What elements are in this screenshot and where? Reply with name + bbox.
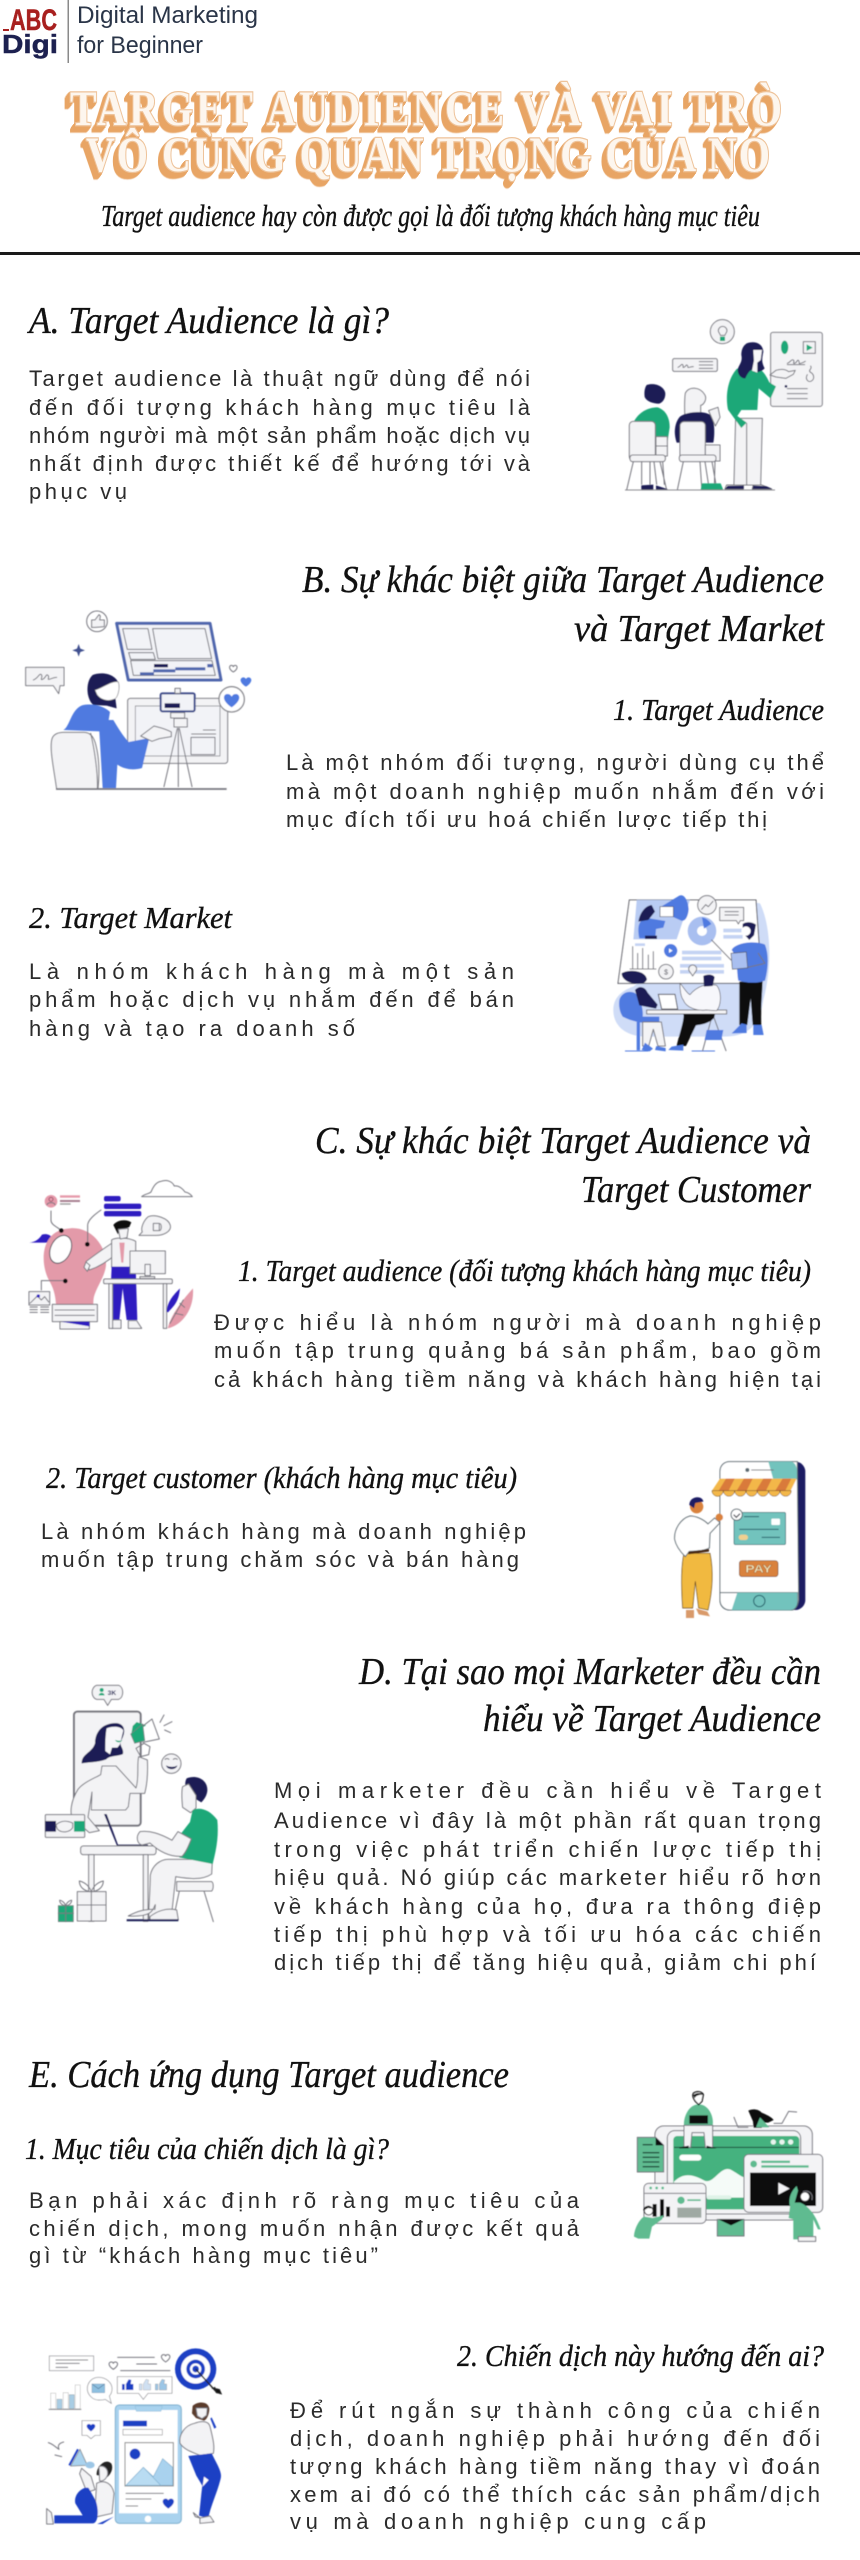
text block: A: Target audience là thuật ngữ dùng để nói	[29, 366, 530, 391]
text block: D	[274, 1778, 821, 1975]
text block: E2: Để rút ngắn sự thành công của chiến	[290, 2398, 820, 2423]
text block: D: hiệu quả. Nó giúp các marketer hiểu rõ hơn	[274, 1865, 821, 1890]
text block: C2	[41, 1519, 526, 1572]
title	[70, 81, 782, 182]
text block: D: về khách hàng của họ, đưa ra thông điệp	[274, 1894, 821, 1919]
header divider	[0, 252, 860, 255]
icon: influencer and viewer	[45, 1685, 218, 1922]
logo: for Beginner	[77, 32, 203, 59]
text block: D: Audience vì đây là một phần rất quan trọng	[274, 1808, 821, 1833]
text block: B1: mà một doanh nghiệp muốn nhắm đến với	[286, 779, 824, 804]
panel: section D	[45, 1651, 821, 1975]
heading: A: A. Target Audience là gì?	[26, 300, 389, 342]
heading: D	[358, 1651, 821, 1740]
text block: A: đến đối tượng khách hàng mục tiêu là	[29, 395, 531, 420]
logo: Digi	[2, 29, 58, 59]
logo	[2, 0, 258, 63]
text block: B1: Là một nhóm đối tượng, người dùng cụ thể	[286, 750, 824, 775]
panel: section E	[25, 2054, 824, 2534]
text block: D: dịch tiếp thị để tăng hiệu quả, giảm chi phí	[274, 1950, 816, 1975]
text block: A: nhóm người mà một sản phẩm hoặc dịch vụ	[29, 423, 530, 448]
text block: E1: gì từ “khách hàng mục tiêu”	[29, 2243, 378, 2268]
panel: section B	[26, 559, 825, 1051]
icon: mobile store with pay button: PAY	[745, 1564, 773, 1576]
text block: B2	[29, 959, 514, 1041]
title: VÔ CÙNG QUAN TRỌNG CỦA NÓ	[86, 127, 770, 182]
heading: B: và Target Market	[574, 608, 825, 650]
icon: influencer and viewer: 3K	[108, 1690, 116, 1697]
heading: B: B. Sự khác biệt giữa Target Audience	[302, 559, 824, 601]
icon: marketing team	[613, 895, 769, 1051]
text block: C1: cả khách hàng tiềm năng và khách hàng hiện tại	[214, 1367, 821, 1392]
text block: E2: vụ mà doanh nghiệp cung cấp	[290, 2509, 706, 2534]
heading: D: hiểu về Target Audience	[483, 1698, 821, 1740]
text block: E1: chiến dịch, mong muốn nhận được kết quả	[29, 2216, 580, 2241]
icon: idea bulb and office worker	[29, 1181, 193, 1329]
text block: E2	[290, 2398, 820, 2534]
text block: D: Mọi marketer đều cần hiểu về Target	[274, 1778, 821, 1803]
heading: C: Target Customer	[581, 1169, 811, 1211]
text block: E1	[29, 2188, 580, 2268]
text block: E1: Bạn phải xác định rõ ràng mục tiêu của	[29, 2188, 580, 2213]
icon: mobile store with pay button	[675, 1462, 805, 1618]
subheading: C2: 2. Target customer (khách hàng mục tiêu)	[46, 1460, 517, 1495]
text block: C2: muốn tập trung chăm sóc và bán hàng	[41, 1547, 519, 1572]
subheading: E1: 1. Mục tiêu của chiến dịch là gì?	[25, 2131, 389, 2166]
text block: C1	[214, 1310, 821, 1392]
text block: A	[29, 366, 531, 504]
text block: C1: muốn tập trung quảng bá sản phẩm, bao gồm	[214, 1338, 821, 1363]
heading: E: E. Cách ứng dụng Target audience	[28, 2054, 509, 2096]
icon: marketing team: $	[664, 967, 668, 976]
heading: D: D. Tại sao mọi Marketer đều cần	[358, 1651, 821, 1693]
heading: C	[315, 1120, 811, 1211]
text block: A: phục vụ	[29, 479, 127, 504]
title: TARGET AUDIENCE VÀ VAI TRÒ	[70, 81, 782, 136]
text block: E2: xem ai đó có thể thích các sản phẩm/dịch	[290, 2482, 820, 2507]
text block: B2: Là nhóm khách hàng mà một sản	[29, 959, 514, 984]
subheading: B1: 1. Target Audience	[613, 692, 824, 727]
text block: D: tiếp thị phù hợp và tối ưu hóa các chiến	[274, 1922, 821, 1947]
text block: E2: dịch, doanh nghiệp phải hướng đến đối	[290, 2426, 820, 2451]
text block: B1: mục đích tối ưu hoá chiến lược tiếp thị	[286, 807, 767, 832]
text block: C2: Là nhóm khách hàng mà doanh nghiệp	[41, 1519, 526, 1544]
panel: section A	[26, 300, 822, 504]
subheading: B2: 2. Target Market	[29, 900, 233, 935]
logo: ABC	[10, 4, 57, 37]
icon: audience presentation	[625, 320, 822, 490]
text block: B2: hàng và tạo ra doanh số	[29, 1016, 355, 1041]
icon: video creator	[26, 611, 251, 789]
text block: C1: Được hiểu là nhóm người mà doanh nghiệp	[214, 1310, 821, 1335]
subheading: E2: 2. Chiến dịch này hướng đến ai?	[457, 2338, 824, 2373]
text block: A: nhất định được thiết kế để hướng tới và	[29, 451, 531, 476]
text block: B2: phẩm hoặc dịch vụ nhắm đến để bán	[29, 987, 514, 1012]
icon: web dashboard team	[634, 2092, 823, 2241]
text block: D: trong việc phát triển chiến lược tiếp thị	[274, 1837, 821, 1862]
text block: B1	[286, 750, 824, 832]
icon: social media targeting	[47, 2348, 221, 2524]
heading: B	[302, 559, 825, 650]
heading: C: C. Sự khác biệt Target Audience và	[315, 1120, 811, 1162]
panel: section C	[29, 1120, 821, 1618]
logo: Digital Marketing	[77, 2, 258, 29]
text block: E2: tượng khách hàng tiềm năng thay vì đoán	[290, 2454, 820, 2479]
